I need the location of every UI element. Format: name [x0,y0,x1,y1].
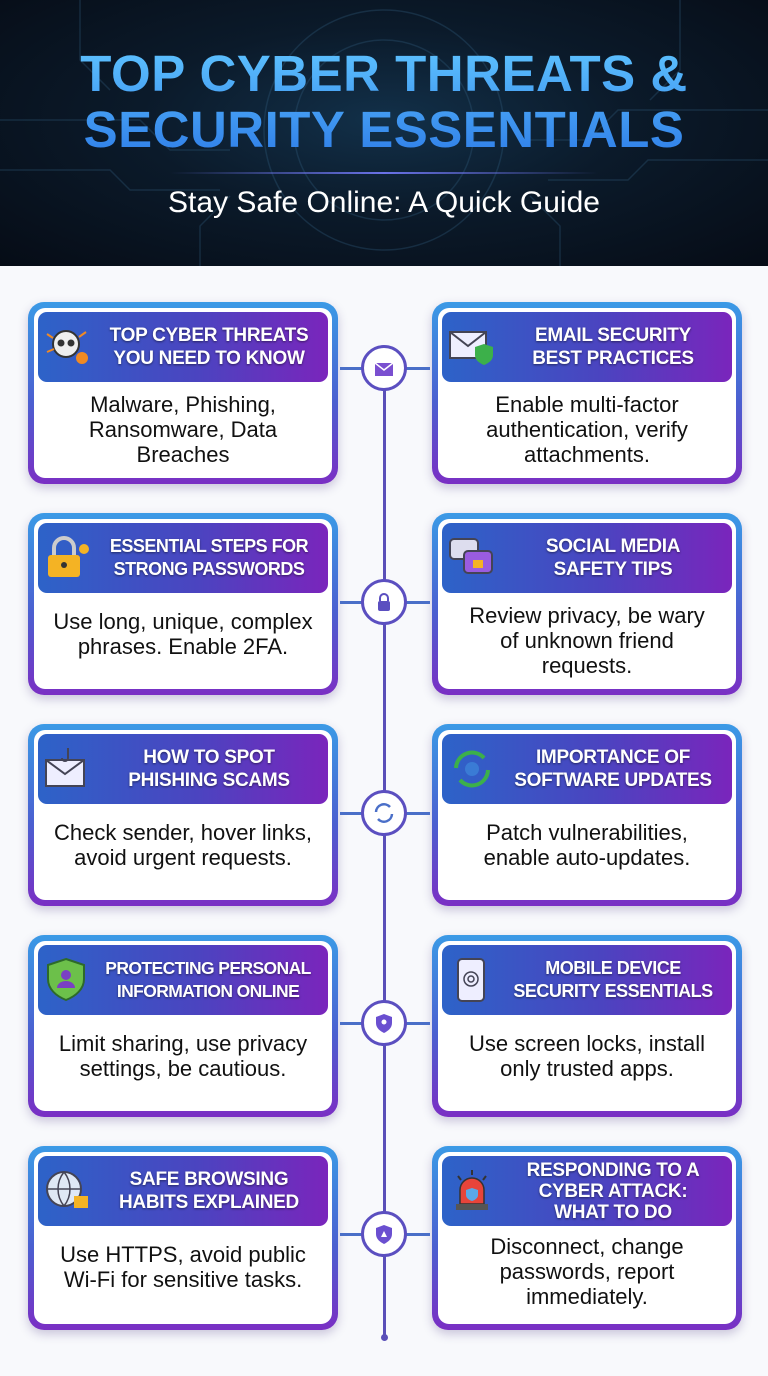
card: software updates: Patch vulnerabilities, [486,820,688,845]
card: safe browsing [28,1146,338,1330]
connector arrows [340,367,430,1236]
card: software updates: SOFTWARE UPDATES [514,770,712,791]
card: safe browsing: Wi-Fi for sensitive tasks. [64,1267,302,1292]
card: passwords [28,513,338,695]
card: responding to attack: immediately. [526,1284,648,1309]
node icon: email [361,345,407,391]
card: phishing: avoid urgent requests. [74,845,292,870]
card: email security [432,302,742,484]
header banner [0,0,768,266]
card: safe browsing: HABITS EXPLAINED [119,1192,299,1213]
card: responding to attack: RESPONDING TO A [527,1160,699,1180]
card: email security: BEST PRACTICES [532,348,694,369]
card: personal info [28,935,338,1117]
node icon: lock [361,579,407,625]
card: top cyber threats: Breaches [137,442,229,467]
card: top cyber threats [28,302,338,484]
card: personal info: settings, be cautious. [80,1056,286,1081]
card: mobile: only trusted apps. [500,1056,674,1081]
subtitle: Stay Safe Online: A Quick Guide [168,186,600,219]
card: email security: authentication, verify [486,417,688,442]
title: TOP CYBER THREATS & [80,45,688,102]
card: top cyber threats: Ransomware, Data [89,417,277,442]
title [0,46,768,158]
card: social media: requests. [542,653,632,678]
card: mobile: Use screen locks, install [469,1031,705,1056]
card: email security: attachments. [524,442,650,467]
card: software updates: enable auto-updates. [484,845,690,870]
card: passwords: Use long, unique, complex [53,609,313,634]
card: phishing [28,724,338,906]
card: social media: of unknown friend [500,628,674,653]
card: passwords: phrases. Enable 2FA. [78,634,288,659]
card: passwords: STRONG PASSWORDS [114,559,304,579]
card: mobile: MOBILE DEVICE [545,958,681,978]
node icon: shield alert [361,1211,407,1257]
card: personal info: PROTECTING PERSONAL [105,958,311,978]
card: social media: SOCIAL MEDIA [546,536,680,557]
card: top cyber threats: YOU NEED TO KNOW [113,348,305,369]
card: mobile: SECURITY ESSENTIALS [513,981,713,1001]
card: personal info: Limit sharing, use privacy [59,1031,307,1056]
title: SECURITY ESSENTIALS [84,101,684,158]
card: phishing: Check sender, hover links, [54,820,312,845]
card: phishing: PHISHING SCAMS [128,770,290,791]
card: mobile [432,935,742,1117]
node icon: shield user [361,1000,407,1046]
card: social media [432,513,742,695]
card: responding to attack: WHAT TO DO [554,1202,672,1222]
card: safe browsing: SAFE BROWSING [130,1169,288,1190]
card: software updates [432,724,742,906]
node icon: refresh [361,790,407,836]
card: social media: SAFETY TIPS [554,559,672,580]
card: top cyber threats: TOP CYBER THREATS [110,325,308,346]
card: personal info: INFORMATION ONLINE [117,981,299,1001]
card: responding to attack: Disconnect, change [490,1234,684,1259]
card: responding to attack: passwords, report [500,1259,674,1284]
card: responding to attack [432,1146,742,1330]
card: phishing: HOW TO SPOT [143,747,275,768]
card: safe browsing: Use HTTPS, avoid public [60,1242,306,1267]
timeline line [383,370,386,1338]
card: top cyber threats: Malware, Phishing, [90,392,276,417]
card: social media: Review privacy, be wary [469,603,705,628]
card: email security: Enable multi-factor [495,392,679,417]
card: email security: EMAIL SECURITY [535,325,691,346]
card: passwords: ESSENTIAL STEPS FOR [110,536,308,556]
card: software updates: IMPORTANCE OF [536,747,690,768]
card: responding to attack: CYBER ATTACK: [539,1180,687,1202]
